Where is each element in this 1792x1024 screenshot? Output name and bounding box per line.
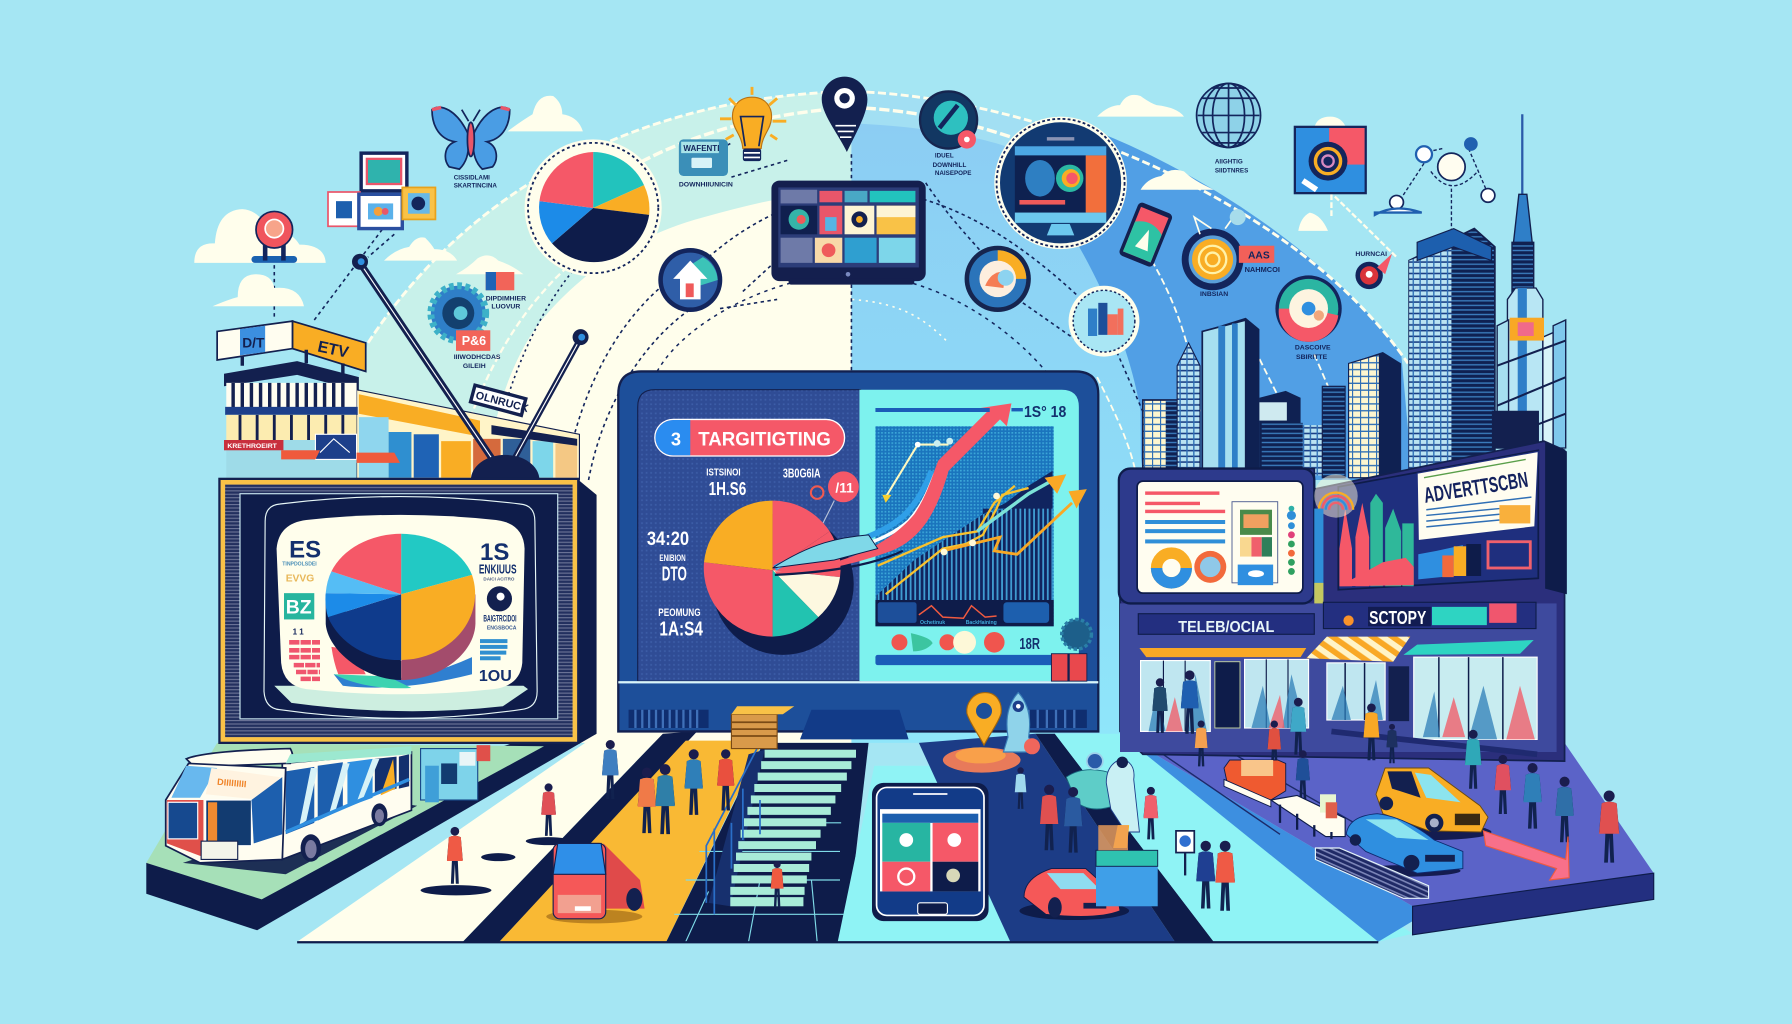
right upper blue dome (851, 89, 1408, 480)
icon: tablet dashboard (771, 181, 926, 285)
chart: area panel: Ochetinuk (920, 620, 945, 626)
icon: blue car (1346, 814, 1463, 877)
icon: ring badge (920, 91, 977, 177)
caption: globe (1215, 158, 1248, 175)
tv labels left: TINPDOLSDEI (282, 562, 317, 568)
monitor left stats (647, 467, 821, 640)
icon: gear with card: DIPDIMHIER (486, 296, 526, 303)
aqua right (1055, 734, 1413, 942)
left mint dome (331, 91, 851, 480)
bus wheels (301, 834, 321, 862)
right medium blue band (1006, 117, 1413, 480)
sign band left (1138, 614, 1314, 636)
stairs (730, 750, 856, 906)
monitor body (618, 371, 1098, 731)
caption: globe: AIIGHTIG (1215, 158, 1243, 165)
tv labels left: BZ (286, 597, 312, 619)
scientist (1106, 759, 1139, 832)
tv bezel (225, 485, 573, 737)
icon: target: NAHMCOI (1245, 265, 1280, 274)
tv labels right: 1OU (479, 668, 512, 685)
tower sign (1510, 318, 1544, 341)
building: short light (1143, 400, 1182, 474)
panel: left building cluster (217, 321, 579, 480)
dark strip (1035, 734, 1214, 942)
icon: robot figure (1003, 693, 1040, 754)
tv inner (240, 494, 558, 719)
panel: retro TV (219, 479, 597, 743)
bus front (166, 763, 286, 863)
chart: area panel (875, 426, 1087, 626)
awning teal (1403, 640, 1534, 655)
store windows right (1327, 657, 1537, 754)
people: storefront (1152, 670, 1619, 863)
icon: smartphone (872, 783, 989, 921)
monitor stand (800, 710, 909, 739)
building: skyscraper (1409, 229, 1495, 480)
icon: red van (546, 843, 645, 923)
tv side (577, 479, 597, 743)
bus body side (282, 752, 411, 859)
awning left (1139, 648, 1306, 657)
left platform side (146, 731, 597, 930)
icon: location pin (822, 77, 867, 152)
navy strip (919, 734, 1175, 942)
icon: target: INBSIAN (1200, 291, 1228, 298)
panel: bus and shops: DIIIIIIIII (217, 777, 247, 789)
crate (731, 706, 794, 749)
chart legend dots (875, 631, 1054, 665)
plant and box (1051, 619, 1091, 681)
icon: gear with card: GILEIH (463, 363, 486, 370)
panel: left building cluster: D/T (242, 335, 265, 350)
store sign: OLNRUCK (474, 390, 530, 415)
icon: tilted phone (1118, 201, 1173, 268)
counter (1096, 857, 1158, 906)
cream road (297, 734, 663, 942)
icon: floor location pin with base (943, 693, 1021, 773)
monitor left stats: ISTSINOI (706, 467, 741, 478)
red outlined box (1488, 542, 1530, 568)
left billboard content (1145, 491, 1296, 585)
tv frame (219, 479, 578, 743)
icon: donut dial (1275, 275, 1342, 361)
targeting pill: TARGITIGTING (698, 429, 831, 451)
icon: gear with card: IIIWODHCDAS (454, 354, 501, 361)
chart: area panel: BackHaining (966, 620, 997, 626)
market stall cart (1224, 760, 1345, 839)
icon: gear with card (431, 272, 526, 370)
people: navy strip (1015, 767, 1235, 911)
main building lower (226, 440, 357, 479)
bus windows (286, 767, 314, 834)
tv labels left: 1 1 (293, 627, 304, 636)
monitor left stats: 3B0G6IA (783, 467, 821, 481)
targeting pill: 3 (671, 429, 681, 450)
floor base line (297, 941, 1378, 943)
tv labels right (479, 539, 517, 685)
building: spire tower (1493, 114, 1566, 448)
icon: info card: WAFENTI (683, 144, 719, 153)
bus stripe (286, 779, 409, 832)
bus shadow (183, 800, 417, 874)
sign band right (1323, 602, 1536, 629)
left billboard frame (1119, 469, 1314, 603)
dashed arcs (274, 91, 1408, 480)
aqua strip (838, 766, 1010, 942)
awning striped (1306, 637, 1410, 662)
dark grid floor (666, 743, 869, 942)
tv labels left (282, 537, 321, 679)
sign band right: SCTOPY (1369, 607, 1426, 628)
left platform top (146, 743, 544, 899)
road stripe (463, 731, 697, 942)
icon: donut dial: DASCOIVE (1295, 345, 1331, 352)
panel: central monitor (618, 371, 1098, 739)
building: cream tall (1349, 352, 1401, 478)
callout: pie marker (811, 471, 859, 523)
targeting pill (655, 419, 845, 456)
left cream dome (486, 190, 851, 743)
icon: square spiral card (1295, 127, 1366, 193)
facade upper right frame (1545, 442, 1567, 594)
monitor left stats: PEOMUNG (658, 607, 701, 619)
monitor left stats: ENIBION (659, 553, 686, 563)
advert panel (1417, 451, 1538, 541)
rainbow icon (1314, 474, 1358, 518)
icon: TV antenna (352, 254, 589, 480)
tv labels right: 1S (480, 539, 509, 566)
tv labels left: EVVG (286, 574, 314, 585)
main building windows (226, 415, 357, 440)
chart legend dots: 18R (1019, 636, 1040, 653)
advert panel: ADVERTTSCBN (1422, 467, 1530, 508)
chart lines (886, 445, 949, 497)
tv tube glass (274, 686, 528, 711)
panel: bus and shops (166, 745, 490, 874)
bus side shops (421, 749, 478, 800)
tv labels right: DAICI ACITRO (483, 577, 515, 582)
panel: left building cluster: KRETHROEIRT (227, 443, 278, 450)
monitor left stats: DTO (662, 563, 687, 586)
arrow: red floor arrow (1483, 831, 1569, 880)
icon: globe (1197, 83, 1261, 147)
chart: tv 3D pie (325, 534, 475, 688)
right inner light blue area (851, 123, 1143, 743)
people and shadows: left road (421, 740, 784, 907)
counter with scientist (1066, 753, 1158, 906)
floor grate (1315, 848, 1429, 898)
building: narrow blue (1303, 425, 1322, 475)
right billboard screen (1338, 450, 1538, 590)
icon: target: AAS (1248, 250, 1270, 261)
facade wall (1120, 603, 1557, 752)
tv labels right: ENGSBOCA (487, 626, 517, 632)
monitor base lip (618, 681, 1098, 683)
icon: network nodes (1375, 137, 1495, 234)
icon: stacked media cards (328, 153, 435, 229)
facade dark frame (1120, 441, 1565, 761)
right billboard spike chart (1339, 494, 1414, 586)
icon: ring badge: DOWNHILL (933, 162, 967, 169)
arrow: red growth swoosh (773, 403, 1011, 575)
tv screen (277, 515, 525, 694)
sign band left: TELEB/OCIAL (1178, 619, 1274, 636)
icon: donut dial: SBIRITTE (1296, 354, 1328, 361)
icon: yellow car (1376, 768, 1491, 840)
chart: monitor pie (704, 501, 854, 655)
icon: info card: DOWNHIIUNICIN (679, 181, 733, 188)
chart header (875, 404, 1066, 421)
icon: house circle (658, 248, 722, 312)
icon: target (1182, 209, 1280, 298)
chart: top pie in circle (525, 139, 662, 277)
icon: desktop in circle (994, 117, 1127, 249)
clouds (194, 95, 1346, 306)
icon: lightbulb (720, 87, 786, 161)
sign stand (1176, 831, 1194, 875)
bus roof (186, 749, 293, 767)
icon: ring badge: IDUEL (935, 153, 954, 160)
billboard divider pole (1314, 509, 1323, 600)
caption: butterfly: CISSIDLAMI (454, 174, 490, 181)
plaza blue edge (1120, 734, 1413, 942)
panel: storefront complex (1119, 441, 1567, 761)
monitor left stats: 1A:S4 (659, 617, 703, 640)
panel: city skyline (1143, 114, 1566, 480)
icon: red bulb on post (251, 211, 297, 263)
panel: left building cluster: ETV (316, 339, 350, 362)
monitor screen left (638, 390, 861, 681)
caption: globe: SIIDTNRES (1215, 168, 1248, 175)
left billboard screen (1137, 481, 1303, 593)
yellow road (499, 741, 763, 942)
monitor screen right (859, 390, 1079, 681)
monitor left stats: 1H.S6 (709, 478, 746, 499)
plaza front (1413, 873, 1654, 935)
icon: skyline in circle (1069, 286, 1139, 357)
teal urn (1066, 770, 1117, 809)
icon: donut badge (965, 246, 1031, 312)
chart header: 1S° 18 (1024, 404, 1066, 421)
stairs side (709, 750, 765, 906)
icon: small red gauge: HURNCAI (1355, 251, 1387, 258)
store windows left (1141, 659, 1309, 731)
sign posts (242, 350, 343, 375)
plaza top (1120, 734, 1654, 906)
tv labels right: ENKIUUS (479, 563, 517, 577)
rooftop sign (217, 321, 293, 360)
right wing of shops (357, 390, 579, 480)
monitor left stats: 34:20 (647, 528, 689, 550)
icon: info card (679, 139, 733, 188)
caption: butterfly (454, 174, 497, 189)
icon: red sports car (1019, 869, 1129, 920)
tv labels left: ES (289, 537, 321, 564)
icon: gear with card: LUOVUR (491, 304, 520, 311)
main building columns (226, 383, 357, 408)
tv labels right: BAIGTRCIDOI (483, 614, 517, 624)
caption: butterfly: SKARTINCINA (454, 182, 497, 189)
building: tall blue (1202, 318, 1259, 474)
icon: butterfly (432, 107, 510, 169)
building: slim spire (1177, 343, 1200, 474)
main building roof (224, 361, 359, 391)
tv tube outline (264, 497, 537, 718)
panel: dome backdrop (331, 89, 1413, 743)
panel: floor strips (146, 731, 1654, 942)
icon: ring badge: NAISEPOPE (935, 170, 971, 177)
icon: small red gauge (1355, 251, 1392, 289)
icon: gear with card: P&6 (462, 334, 486, 348)
stair railing (706, 743, 760, 914)
building: mid dark (1259, 391, 1301, 474)
callout: pie marker: /11 (835, 481, 854, 496)
right billboard blocks (1418, 545, 1463, 579)
